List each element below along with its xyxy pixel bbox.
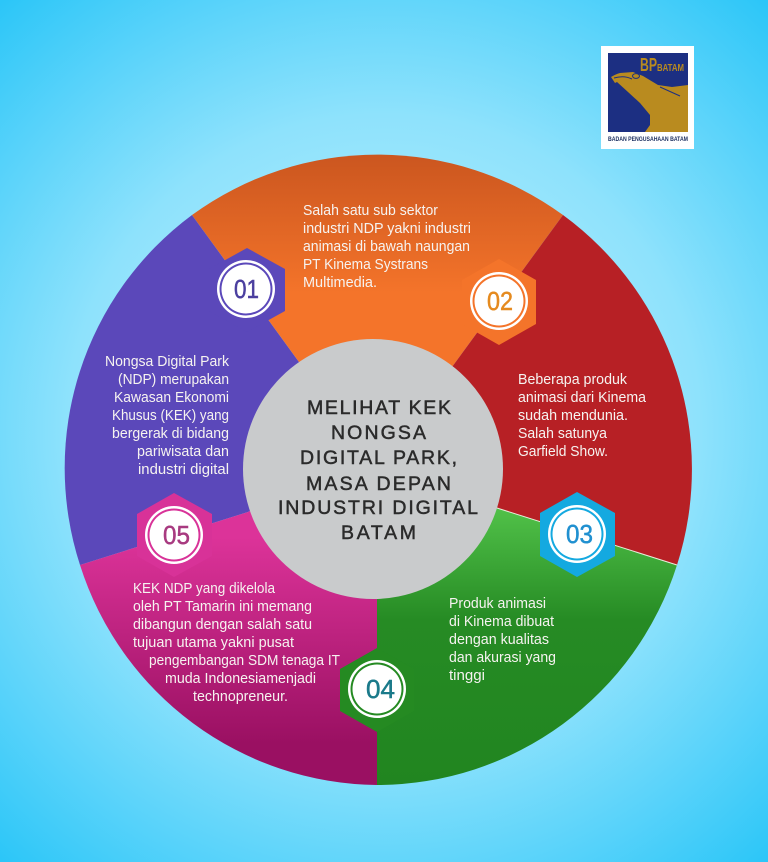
text block 04: Produk animasi <box>449 595 546 612</box>
badge 04 <box>340 648 414 732</box>
title: MELIHAT KEK <box>307 397 451 419</box>
segment: green 04 <box>377 480 677 785</box>
text block 01: industri digital <box>138 461 229 478</box>
text block 03: animasi dari Kinema <box>518 389 647 406</box>
text block 01 <box>105 353 229 478</box>
divider between red and green <box>497 508 677 565</box>
badge 02: 02 <box>487 286 513 316</box>
title <box>278 397 478 544</box>
segment: orange 02 <box>192 155 563 400</box>
title: DIGITAL PARK, <box>300 447 457 469</box>
text block 02: Salah satu sub sektor <box>303 202 438 219</box>
text block 05: technopreneur. <box>193 688 288 705</box>
badge 05 <box>137 493 212 577</box>
text block 04: tinggi <box>449 667 485 684</box>
text block 01: pariwisata dan <box>137 443 229 460</box>
logo: BP Batam <box>601 46 694 149</box>
text block 05 <box>133 580 340 705</box>
logo: BP Batam: BADAN PENGUSAHAAN BATAM <box>608 136 688 143</box>
text block 04: dan akurasi yang <box>449 649 556 666</box>
text block 01: Kawasan Ekonomi <box>114 389 229 406</box>
badge 03 <box>540 492 615 577</box>
text block 02: industri NDP yakni industri <box>303 220 471 237</box>
text block 03: Garfield Show. <box>518 443 608 460</box>
text block 05: oleh PT Tamarin ini memang <box>133 598 312 615</box>
text block 03: Beberapa produk <box>518 371 627 388</box>
title: MASA DEPAN <box>306 473 451 495</box>
badge 05: 05 <box>163 520 190 550</box>
title: INDUSTRI DIGITAL <box>278 497 478 519</box>
text block 02: Multimedia. <box>303 274 377 291</box>
text block 03: Salah satunya <box>518 425 608 442</box>
text block 02: animasi di bawah naungan <box>303 238 470 255</box>
text block 05: KEK NDP yang dikelola <box>133 580 276 597</box>
center circle <box>243 339 503 599</box>
badge 03: 03 <box>566 519 593 549</box>
segment: purple 01 <box>65 215 320 565</box>
text block 03: sudah mendunia. <box>518 407 628 424</box>
text block 05: dibangun dengan salah satu <box>133 616 312 633</box>
text block 02 <box>303 202 471 291</box>
title: BATAM <box>341 522 416 544</box>
badge 02 <box>462 259 536 345</box>
badge 01: 01 <box>234 274 259 304</box>
logo: BP Batam: BATAM <box>657 63 684 74</box>
text block 01: Nongsa Digital Park <box>105 353 229 370</box>
badge 01 <box>209 248 285 332</box>
segment: magenta 05 <box>80 470 377 785</box>
text block 05: muda Indonesiamenjadi <box>165 670 316 687</box>
segment: red 03 <box>440 215 692 565</box>
text block 04: dengan kualitas <box>449 631 549 648</box>
text block 01: bergerak di bidang <box>112 425 229 442</box>
text block 05: pengembangan SDM tenaga IT <box>149 652 340 669</box>
text block 01: (NDP) merupakan <box>118 371 229 388</box>
text block 04: di Kinema dibuat <box>449 613 555 630</box>
text block 02: PT Kinema Systrans <box>303 256 428 273</box>
text block 03 <box>518 371 647 460</box>
badge 04: 04 <box>366 674 395 704</box>
title: NONGSA <box>331 422 426 444</box>
text block 05: tujuan utama yakni pusat <box>133 634 295 651</box>
text block 04 <box>449 595 556 684</box>
logo: BP Batam: BP <box>640 55 657 75</box>
text block 01: Khusus (KEK) yang <box>112 407 229 424</box>
